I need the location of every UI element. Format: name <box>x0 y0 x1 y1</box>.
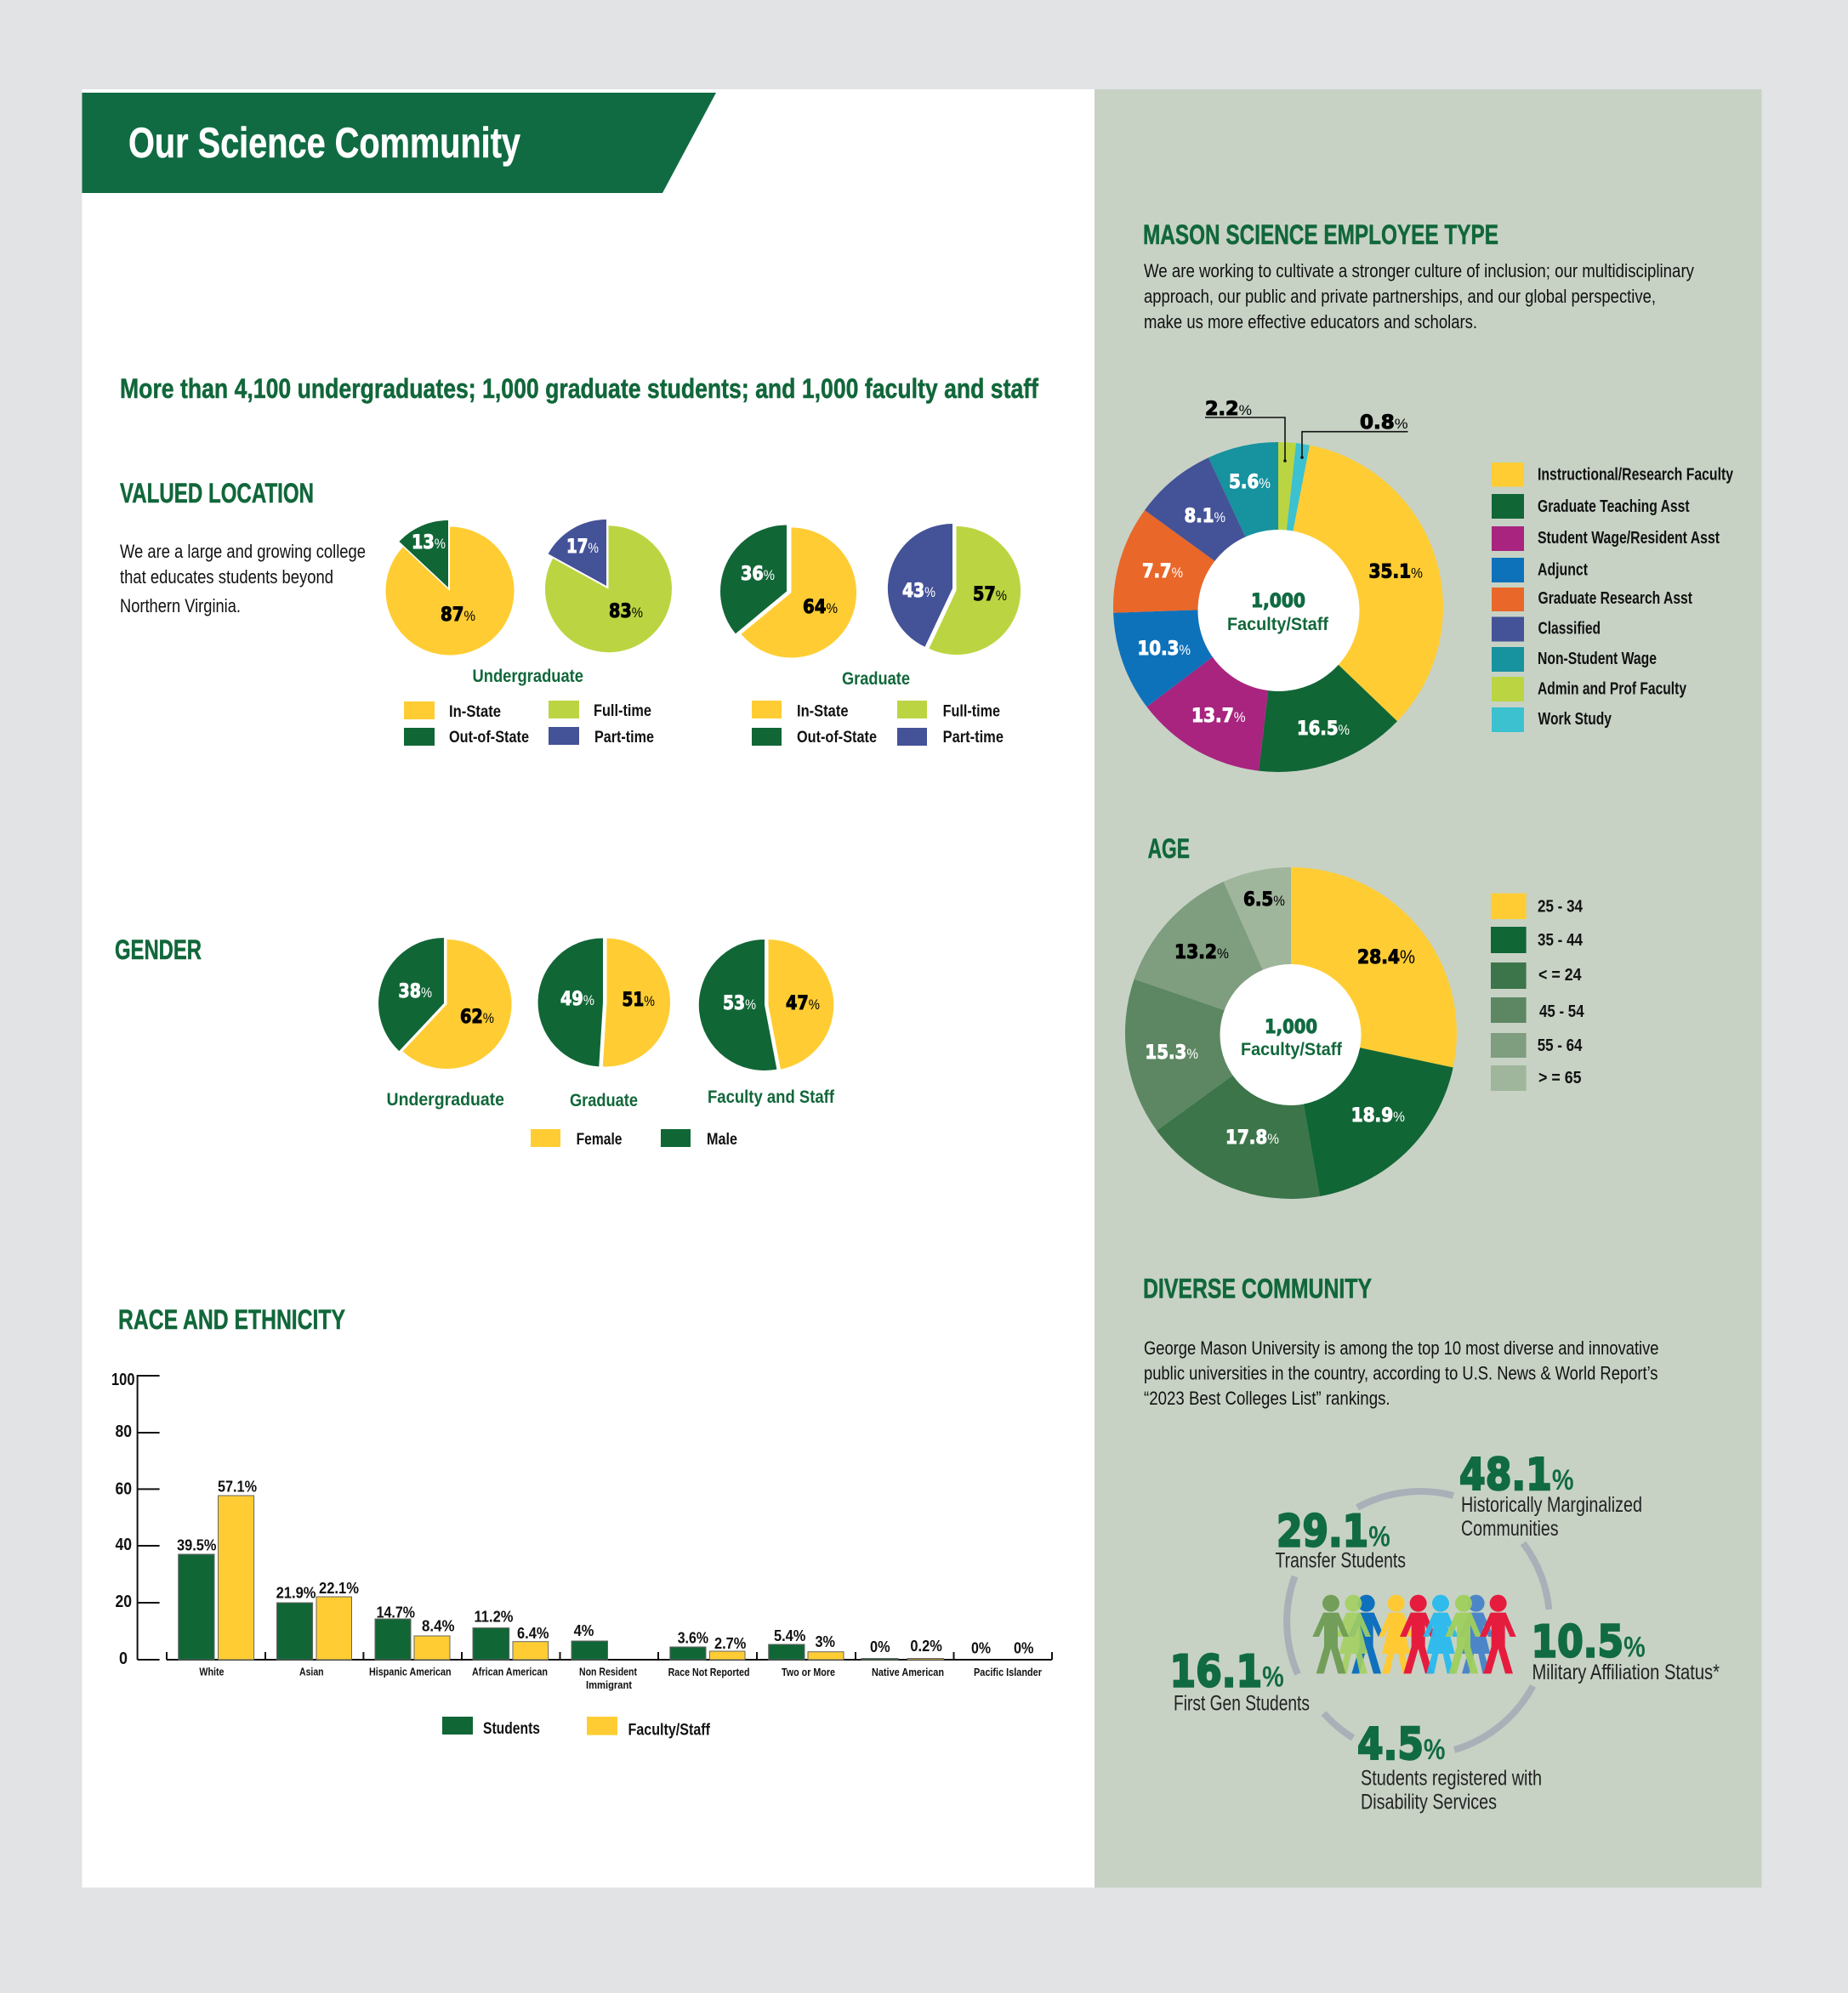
donut chart: age: 1,000 <box>1265 1017 1317 1038</box>
callout: 2.2 percent <box>1205 399 1287 463</box>
category labels: Asian <box>299 1666 324 1678</box>
stat: military affiliation: 10.5% <box>1531 1617 1646 1668</box>
bar value labels <box>177 1479 1034 1657</box>
donut chart: employee type <box>1113 442 1443 772</box>
legend: gender: Male <box>707 1131 737 1149</box>
section: age <box>1125 833 1584 1199</box>
donut chart: employee type: 8.1% <box>1184 506 1225 527</box>
category labels <box>199 1666 1042 1691</box>
legend: race and ethnicity <box>442 1717 711 1740</box>
bar value labels: 3% <box>815 1633 835 1650</box>
bar value labels: 0% <box>1014 1640 1034 1657</box>
legend: undergraduate: Out-of-State <box>449 729 529 747</box>
donut chart: employee type: 1,000 <box>1251 591 1305 612</box>
stat: first gen students: First Gen Students <box>1174 1692 1310 1716</box>
stat: disability services: Disability Services <box>1361 1791 1497 1814</box>
legend: race and ethnicity: Faculty/Staff <box>628 1722 711 1740</box>
section: gender <box>115 934 835 1149</box>
bar chart: race and ethnicity <box>111 1371 1052 1691</box>
pie chart: undergraduate gender: 62% <box>460 1007 494 1028</box>
legend: graduate: In-State <box>797 702 849 721</box>
legend: graduate: Out-of-State <box>797 729 877 747</box>
donut chart: age: 18.9% <box>1351 1105 1405 1127</box>
label: faculty and staff: Faculty and Staff <box>708 1087 835 1107</box>
panel: left white community panel <box>82 89 1095 1888</box>
bar value labels: 14.7% <box>377 1604 415 1621</box>
donut chart: age: 17.8% <box>1225 1127 1279 1149</box>
stat: historically marginalized: Communities <box>1461 1517 1559 1541</box>
legend: age: 35 - 44 <box>1538 931 1584 950</box>
legend: employee type: Work Study <box>1538 710 1612 729</box>
stat: disability services <box>1357 1719 1542 1814</box>
text block: diverse community description: public universities in the country, according to U.S. News & World Report’s <box>1144 1362 1658 1384</box>
pie chart: undergraduate gender: 38% <box>398 981 432 1002</box>
donut chart: age: 13.2% <box>1174 942 1229 963</box>
stat: historically marginalized <box>1459 1450 1642 1541</box>
bar value labels: 0% <box>971 1640 991 1657</box>
y axis labels: 20 <box>116 1593 132 1611</box>
bar value labels: 57.1% <box>218 1479 257 1496</box>
bar value labels: 39.5% <box>177 1537 216 1554</box>
legend: age: 45 - 54 <box>1539 1002 1584 1021</box>
heading: employee type: MASON SCIENCE EMPLOYEE TYPE <box>1143 219 1498 250</box>
y axis labels: 40 <box>116 1536 132 1554</box>
text block: valued location description: Northern Virginia. <box>120 595 241 616</box>
label: undergraduate: Undergraduate <box>473 667 583 686</box>
pie chart: undergraduate full-time <box>545 520 672 652</box>
heading: gender: GENDER <box>115 934 202 965</box>
stat: transfer students <box>1276 1507 1406 1573</box>
legend: gender: Female <box>577 1131 623 1149</box>
label: graduate: Graduate <box>842 669 910 689</box>
text block: diverse community description: George Mason University is among the top 10 most diverse and innovative <box>1144 1337 1658 1359</box>
stat: historically marginalized: Historically Marginalized <box>1461 1493 1642 1517</box>
legend: employee type: Non-Student Wage <box>1538 650 1657 668</box>
stat: military affiliation <box>1531 1617 1720 1684</box>
chart axes <box>138 1376 1052 1660</box>
legend: graduate: Full-time <box>943 702 1000 721</box>
pie chart: graduate in-state: 64% <box>803 597 838 618</box>
donut chart: employee type: 7.7% <box>1142 561 1183 582</box>
bar value labels: 21.9% <box>276 1585 316 1602</box>
donut chart: age: Faculty/Staff <box>1241 1040 1343 1059</box>
y axis labels: 100 <box>111 1371 134 1389</box>
pie chart: graduate full-time: 57% <box>973 584 1007 605</box>
bar value labels: 2.7% <box>714 1635 746 1652</box>
pie chart: undergraduate full-time: 17% <box>566 537 599 558</box>
donut chart: age: 28.4% <box>1357 946 1415 968</box>
pie chart: graduate in-state <box>720 525 856 658</box>
pie chart: graduate gender: 51% <box>623 990 655 1011</box>
ring arcs around people <box>1287 1491 1549 1750</box>
pie chart: undergraduate in-state: 13% <box>412 532 446 554</box>
bar value labels: 5.4% <box>774 1627 805 1644</box>
text block: diverse community description: “2023 Best Colleges List” rankings. <box>1144 1388 1390 1409</box>
legend: graduate <box>752 701 1004 747</box>
bar value labels: 3.6% <box>678 1630 708 1647</box>
bar value labels: 8.4% <box>422 1618 454 1635</box>
y axis labels: 60 <box>116 1479 132 1498</box>
legend: undergraduate: Full-time <box>594 702 651 720</box>
title: Our Science Community <box>128 119 520 167</box>
bar value labels: 6.4% <box>517 1625 549 1642</box>
category labels: Hispanic American <box>369 1666 452 1678</box>
legend: employee type: Graduate Teaching Asst <box>1538 497 1690 516</box>
legend: age: 55 - 64 <box>1538 1036 1583 1055</box>
bars: faculty and staff <box>218 1496 944 1660</box>
y axis labels: 80 <box>116 1422 132 1441</box>
category labels: Pacific Islander <box>974 1666 1042 1678</box>
bar value labels: 11.2% <box>475 1609 514 1626</box>
category labels: Immigrant <box>586 1678 633 1691</box>
legend: undergraduate <box>404 701 654 747</box>
donut chart: age <box>1125 867 1457 1199</box>
stat: military affiliation: Military Affiliation Status* <box>1532 1661 1720 1684</box>
pie chart: undergraduate gender <box>378 938 512 1069</box>
text block: employee type description: approach, our public and private partnerships, and our global perspective, <box>1144 286 1656 307</box>
bar value labels: 4% <box>574 1622 594 1639</box>
pie chart: undergraduate in-state: 87% <box>441 605 475 626</box>
y axis labels: 0 <box>119 1649 128 1668</box>
pie chart: graduate full-time <box>888 524 1021 655</box>
callout: 0.8 percent <box>1300 412 1408 459</box>
pie chart: faculty and staff gender <box>699 940 833 1070</box>
heading: diverse community: DIVERSE COMMUNITY <box>1143 1274 1372 1304</box>
legend: employee type: Classified <box>1538 620 1601 639</box>
bars: students <box>179 1554 898 1660</box>
callout: 0.8 percent: 0.8% <box>1360 412 1408 434</box>
legend: gender <box>531 1129 737 1149</box>
heading: race and ethnicity: RACE AND ETHNICITY <box>118 1304 345 1335</box>
legend: employee type: Admin and Prof Faculty <box>1538 680 1687 699</box>
donut chart: employee type: 13.7% <box>1191 706 1246 727</box>
text block: valued location description: that educates students beyond <box>120 566 333 588</box>
stat: first gen students: 16.1% <box>1170 1647 1284 1698</box>
legend: graduate: Part-time <box>943 729 1004 747</box>
text block: employee type description: We are working to cultivate a stronger culture of inclusion; our multidisciplinary <box>1144 260 1694 281</box>
legend: race and ethnicity: Students <box>483 1720 540 1738</box>
pie chart: graduate in-state: 36% <box>741 564 775 585</box>
legend: employee type: Student Wage/Resident Asst <box>1538 529 1720 548</box>
category labels: African American <box>472 1666 548 1678</box>
legend: employee type: Graduate Research Asst <box>1538 589 1692 608</box>
pie chart: undergraduate full-time: 83% <box>609 601 643 622</box>
heading: valued location: VALUED LOCATION <box>120 478 314 508</box>
legend: age <box>1491 894 1584 1091</box>
stat: transfer students: 29.1% <box>1277 1507 1390 1558</box>
pie chart: graduate full-time: 43% <box>902 581 935 602</box>
category labels: Two or More <box>782 1666 835 1678</box>
section: valued location <box>120 478 1021 747</box>
pie chart: undergraduate in-state <box>386 520 515 656</box>
donut chart: age: 6.5% <box>1243 889 1285 911</box>
section: diverse community <box>1143 1274 1720 1814</box>
pie chart: graduate gender <box>538 938 670 1066</box>
category labels: White <box>199 1666 225 1678</box>
label: graduate: Graduate <box>570 1091 638 1110</box>
legend: undergraduate: Part-time <box>594 729 654 747</box>
pie chart: faculty and staff gender: 53% <box>723 993 756 1014</box>
stat: disability services: 4.5% <box>1357 1719 1446 1770</box>
donut chart: employee type: Faculty/Staff <box>1227 615 1329 634</box>
category labels: Race Not Reported <box>668 1666 750 1678</box>
donut chart: employee type: 10.3% <box>1138 639 1191 660</box>
bar value labels: 22.1% <box>319 1580 359 1597</box>
category labels: Non Resident <box>579 1666 638 1678</box>
legend: age: < = 24 <box>1538 966 1582 985</box>
section: employee type <box>1113 219 1734 772</box>
stat: historically marginalized: 48.1% <box>1459 1450 1573 1501</box>
stat: disability services: Students registered with <box>1361 1767 1542 1791</box>
legend: age: > = 65 <box>1538 1069 1582 1087</box>
summary heading: More than 4,100 undergraduates; 1,000 graduate students; and 1,000 faculty and staff <box>120 373 1038 404</box>
donut chart: employee type: 5.6% <box>1229 472 1271 493</box>
pie chart: graduate gender: 49% <box>560 989 594 1010</box>
section: race and ethnicity <box>111 1304 1052 1740</box>
legend: employee type: Adjunct <box>1538 560 1588 579</box>
legend: age: 25 - 34 <box>1538 898 1584 917</box>
donut chart: age: 15.3% <box>1145 1042 1198 1064</box>
panel: right sage employee and diversity panel <box>1095 89 1762 1888</box>
category labels: Native American <box>872 1666 944 1678</box>
donut chart: employee type: 16.5% <box>1297 718 1350 740</box>
y axis labels <box>111 1371 134 1668</box>
pie chart: faculty and staff gender: 47% <box>786 993 820 1014</box>
heading: age: AGE <box>1148 833 1190 864</box>
text block: valued location description: We are a large and growing college <box>120 541 366 562</box>
bar value labels: 0.2% <box>910 1638 942 1655</box>
stat: transfer students: Transfer Students <box>1276 1549 1406 1573</box>
donut chart: employee type: 35.1% <box>1369 562 1423 583</box>
stat: first gen students <box>1170 1647 1310 1716</box>
callout: 2.2 percent: 2.2% <box>1205 399 1252 420</box>
legend: undergraduate: In-State <box>449 703 501 721</box>
label: undergraduate: Undergraduate <box>386 1090 504 1110</box>
icon: row of people <box>1312 1595 1516 1673</box>
text block: diverse community description <box>1144 1337 1658 1409</box>
title banner <box>82 93 716 193</box>
text block: valued location description <box>120 541 366 616</box>
text block: employee type description <box>1144 260 1694 332</box>
legend: employee type <box>1492 463 1734 732</box>
text block: employee type description: make us more effective educators and scholars. <box>1144 311 1477 332</box>
legend: employee type: Instructional/Research Faculty <box>1538 465 1734 484</box>
bar value labels: 0% <box>870 1638 890 1655</box>
